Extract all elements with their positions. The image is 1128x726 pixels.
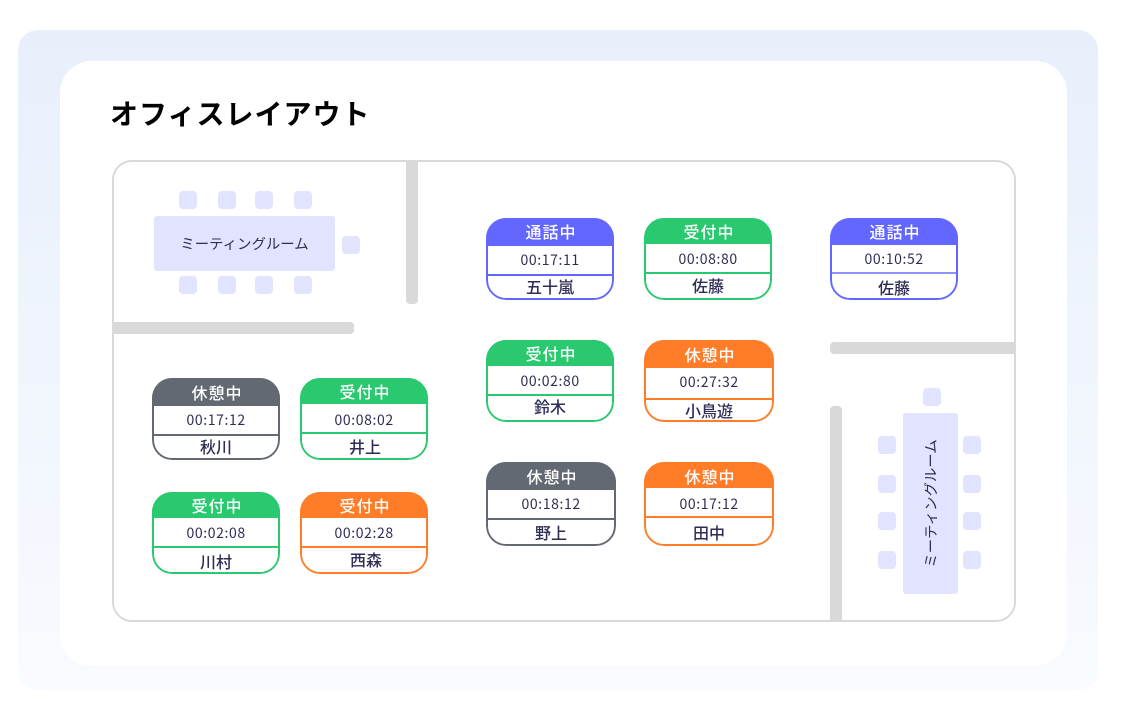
- status card: 井上: 受付中: [339, 379, 390, 403]
- meeting table: [154, 216, 335, 271]
- status card: 小鳥遊: 小鳥遊: [685, 398, 733, 422]
- chair: [342, 236, 360, 254]
- status card: 井上: [300, 378, 428, 460]
- status card: 西森: 西森: [350, 547, 382, 571]
- status card: 鈴木: 鈴木: [534, 394, 566, 418]
- chair: [218, 191, 236, 209]
- chair: [294, 276, 312, 294]
- white card panel: [60, 61, 1067, 666]
- status card: 川村: 受付中: [191, 493, 242, 517]
- meeting room: bottom right: [878, 388, 981, 594]
- status card: 西森: 00:02:28: [334, 523, 394, 543]
- floor plan outline: [112, 160, 1016, 622]
- status card: 佐藤 (通話中): 通話中: [869, 219, 920, 243]
- chair: [218, 276, 236, 294]
- wall: right horizontal: [830, 342, 1015, 354]
- chair: [294, 191, 312, 209]
- status card: 田中: 田中: [693, 520, 725, 544]
- status card: 野上: 00:18:12: [521, 494, 581, 514]
- status card: 鈴木: 受付中: [525, 341, 576, 365]
- chair: [878, 512, 896, 530]
- status card: 田中: 00:17:12: [679, 494, 739, 514]
- chair: [255, 276, 273, 294]
- status card: 井上: 00:08:02: [334, 410, 394, 430]
- status card: 小鳥遊: [644, 340, 774, 422]
- status card: 小鳥遊: 00:27:32: [679, 372, 739, 392]
- chair: [878, 551, 896, 569]
- status card: 川村: [152, 492, 280, 574]
- status card: 西森: [300, 492, 428, 574]
- status card: 田中: 休憩中: [684, 464, 736, 488]
- status card: 佐藤 (通話中): [830, 218, 958, 300]
- wall: right vertical: [830, 406, 842, 621]
- status card: 佐藤 (受付中): 佐藤: [692, 273, 724, 297]
- status card: 小鳥遊: 休憩中: [684, 342, 736, 366]
- chair: [963, 551, 981, 569]
- status card: 佐藤 (受付中): 00:08:80: [678, 249, 738, 269]
- status card: 五十嵐: 通話中: [525, 219, 576, 243]
- meeting table: ミーティングルーム: [180, 233, 309, 254]
- meeting table: [903, 413, 958, 594]
- status card: 秋川: 秋川: [200, 434, 232, 458]
- title: オフィスレイアウト: [110, 93, 370, 133]
- status card: 田中: [644, 462, 774, 546]
- status card: 野上: 休憩中: [526, 464, 578, 488]
- status card: 鈴木: [486, 340, 614, 422]
- status card: 秋川: 休憩中: [191, 380, 242, 404]
- status card: 野上: 野上: [535, 520, 567, 544]
- status card: 佐藤 (通話中): 佐藤: [878, 275, 910, 299]
- status card: 佐藤 (通話中): 00:10:52: [864, 249, 924, 269]
- status card: 川村: 川村: [200, 549, 232, 573]
- meeting table label: ミーティングルーム: [920, 439, 941, 568]
- chair: [178, 191, 196, 209]
- chair: [255, 191, 273, 209]
- status card: 鈴木: 00:02:80: [520, 371, 580, 391]
- status card: 秋川: 00:17:12: [186, 410, 246, 430]
- chair: [923, 388, 941, 406]
- status card: 井上: 井上: [349, 434, 381, 458]
- chair: [963, 512, 981, 530]
- chair: [878, 475, 896, 493]
- status card: 佐藤 (受付中): 受付中: [683, 219, 734, 243]
- meeting room: top left: [154, 191, 360, 294]
- wall: left horizontal: [113, 322, 354, 334]
- chair: [178, 276, 196, 294]
- status card: 佐藤 (受付中): [644, 218, 772, 300]
- chair: [878, 436, 896, 454]
- status card: 五十嵐: 五十嵐: [526, 274, 574, 298]
- status card: 川村: 00:02:08: [186, 523, 246, 543]
- status card: 西森: 受付中: [339, 493, 390, 517]
- chair: [963, 436, 981, 454]
- status card: 秋川: [152, 378, 280, 460]
- wall: top vertical: [406, 161, 418, 304]
- chair: [963, 475, 981, 493]
- status card: 五十嵐: [486, 218, 614, 300]
- status card: 五十嵐: 00:17:11: [520, 250, 580, 270]
- status card: 野上: [486, 462, 616, 546]
